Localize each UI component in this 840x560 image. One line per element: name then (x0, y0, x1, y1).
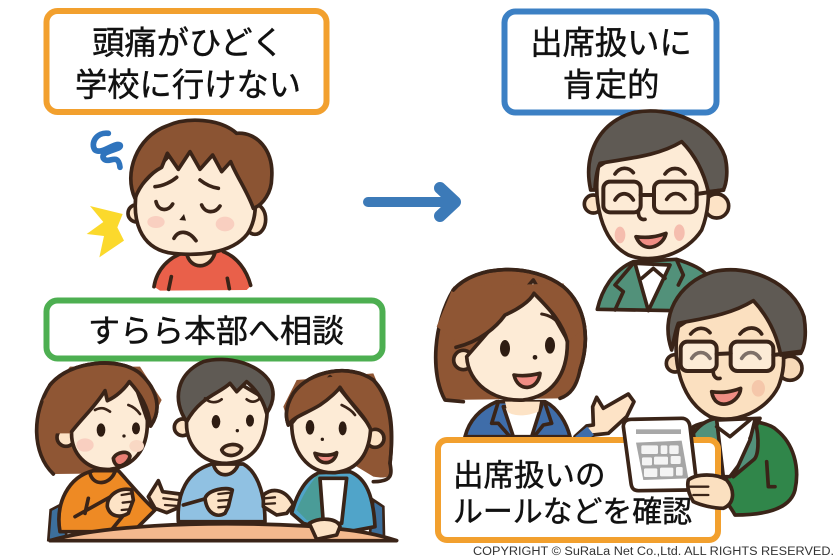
illustration: family consultation (37, 359, 397, 541)
copyright: COPYRIGHT © SuRaLa Net Co.,Ltd. ALL RIGHTS RESERVED. (473, 546, 834, 558)
callout: confirm the rules: ルールなどを確認 (453, 496, 692, 529)
illustration: tablet and hand (623, 418, 733, 508)
chair backs (48, 500, 384, 540)
hair (131, 120, 272, 208)
callout: headache (46, 11, 326, 112)
face (135, 127, 255, 254)
icon: yellow pain burst (87, 206, 124, 257)
callout: confirm the rules: 出席扱いの (453, 459, 606, 493)
illustration: woman and teacher (436, 270, 805, 515)
callout: treated as attendance: 肯定的 (563, 67, 659, 103)
illustration: boy with headache (87, 120, 272, 291)
figure: teacher in green suit (666, 270, 805, 515)
callout: headache: 学校に行けない (75, 67, 301, 103)
icon: blue dizzy swirl (93, 133, 120, 167)
illustration: teacher top (584, 111, 729, 311)
figure: mother left (37, 363, 181, 532)
arrow (368, 188, 455, 216)
callout: consult headquarters (46, 300, 382, 358)
neck (187, 253, 215, 266)
tablet (623, 418, 697, 491)
callout: treated as attendance (504, 12, 716, 112)
figure: woman in blue suit (436, 270, 634, 442)
callout: consult headquarters: すらら本部へ相談 (88, 313, 344, 349)
figure: child centre (174, 359, 273, 522)
eyebrows, eyes, nose, mouth (155, 177, 220, 241)
ears (128, 205, 145, 222)
hand (688, 475, 733, 508)
callout: treated as attendance: 出席扱いに (530, 25, 692, 61)
table (50, 524, 397, 541)
figure: mother right (263, 371, 392, 533)
shirt (154, 252, 251, 291)
callout: confirm the rules (438, 440, 718, 540)
callout: headache: 頭痛がひどく (92, 25, 284, 61)
